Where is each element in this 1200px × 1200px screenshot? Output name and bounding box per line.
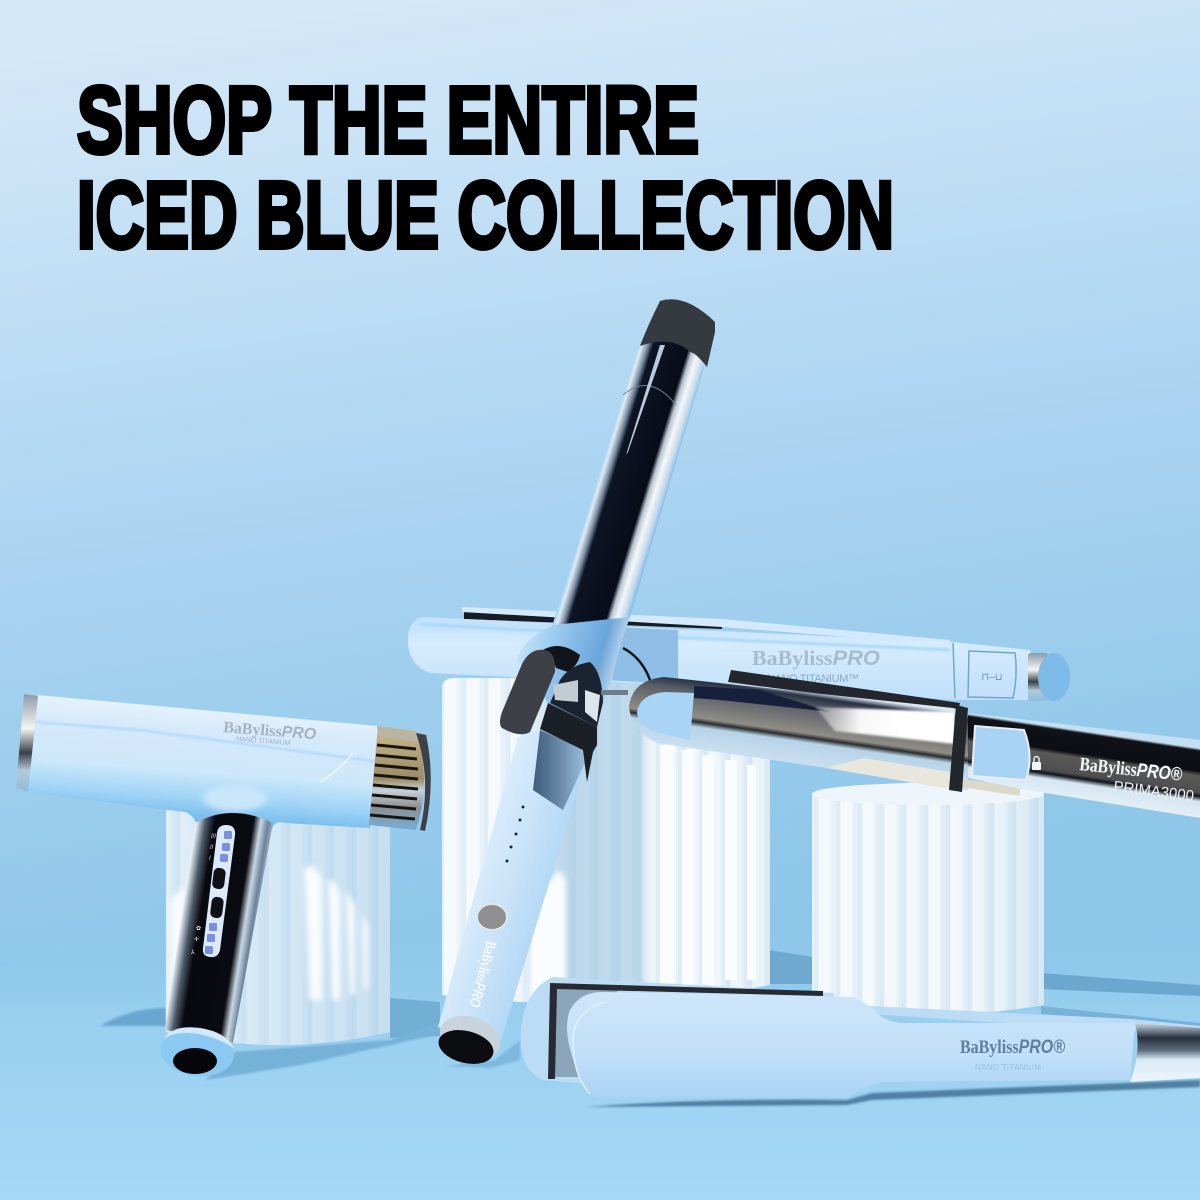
wand logo: BaBylissPRO (465, 939, 500, 1009)
top iron subtitle: NANO TITANIUM™ (767, 673, 859, 685)
dryer neck glow (203, 785, 267, 811)
dryer logo: BaBylissPRO (223, 719, 317, 743)
bottom iron chrome tip (1130, 1023, 1200, 1082)
prima dark top reflection (694, 686, 831, 712)
bottom iron paddle edge light (573, 1002, 606, 1094)
wand clip lever (500, 650, 555, 734)
prima highlight (815, 707, 955, 744)
wand hinge dark (543, 646, 580, 672)
pedestal: right (812, 780, 1044, 1020)
pedestal top (812, 783, 1044, 805)
dryer icons: ✢ (194, 936, 199, 943)
flat iron: chrome Prima 3000 (629, 670, 1200, 818)
prima model name: PRIMA3000 (1113, 778, 1195, 805)
dryer icons: // (210, 845, 214, 851)
prima black band (949, 705, 968, 792)
title line 2: ICED BLUE COLLECTION (77, 162, 894, 268)
top iron shaded section near barrel (604, 627, 678, 684)
prima logo: BaBylissPRO® (1078, 754, 1183, 786)
wand power button (477, 904, 507, 930)
top iron highlight (420, 624, 950, 650)
dryer end cap (157, 1023, 237, 1081)
bottom iron mirror plate (553, 985, 620, 1077)
wand barrel seam (623, 386, 676, 405)
top iron chrome collar (1028, 653, 1048, 701)
pedestal: left (166, 810, 390, 1050)
light stripes on left pedestal (170, 866, 368, 1020)
curling wand (434, 299, 715, 1069)
bottom iron back arm (521, 977, 840, 1085)
prima right section (968, 713, 1200, 818)
dryer barrel (28, 695, 378, 830)
bottom iron logo: BaBylissPRO® (960, 1037, 1065, 1058)
dryer icons: ✿ (196, 925, 201, 932)
flat iron: bottom, wide plate (521, 977, 1200, 1098)
bottom iron subtitle: NANO TITANIUM (975, 1063, 1041, 1072)
prima blue tip cap (637, 692, 694, 740)
dryer buttons (205, 831, 232, 954)
top iron lock icon: ⊓–⊔ (981, 672, 1003, 683)
dryer fan face (416, 733, 431, 831)
wand barrel reflection line (626, 345, 665, 455)
wand indicator dots (506, 806, 524, 862)
wand hinge body (550, 662, 603, 727)
dryer subtitle: NANO TITANIUM (236, 736, 291, 747)
dryer highlight (32, 722, 380, 762)
top iron body (408, 617, 1033, 700)
title (77, 68, 894, 268)
prima upper plate (728, 670, 960, 712)
wand handle shadow (533, 730, 590, 810)
wand connector (601, 690, 628, 695)
dryer chrome handle (165, 813, 273, 1043)
dryer end hole (173, 1048, 217, 1074)
dryer icons: /// (211, 834, 216, 840)
dryer nozzle grille (369, 726, 431, 831)
pedestal: center (442, 676, 770, 1016)
dryer rear cap (16, 694, 38, 792)
wand handle (438, 728, 590, 1050)
title line 1: SHOP THE ENTIRE (77, 68, 699, 174)
wand barrel (553, 332, 704, 660)
dryer icons: ⅄ (190, 949, 195, 956)
top iron hinge panel (953, 643, 1016, 698)
bottom iron plate edge (548, 983, 823, 1079)
wand tip (640, 299, 715, 367)
wand base opening (435, 1025, 497, 1069)
wand clamp collar (517, 617, 630, 727)
top iron logo: BaBylissPRO (752, 646, 880, 670)
prima lock icon (1032, 756, 1041, 770)
top iron end cap (1038, 653, 1070, 701)
wand base chrome (434, 1008, 506, 1068)
flat iron: top, Nano Titanium (408, 607, 1070, 701)
wand hinge glint (585, 690, 600, 722)
dryer icons (190, 834, 216, 956)
top iron cord (623, 648, 650, 680)
wand black band (540, 703, 597, 782)
dryer control panel (203, 825, 235, 957)
top iron upper arm (464, 610, 722, 629)
prima cream reflection (827, 758, 950, 789)
wand hinge chrome (553, 680, 578, 702)
hair dryer (16, 694, 431, 1081)
dryer glint (320, 753, 353, 782)
dryer icons: / (209, 856, 211, 862)
dryer dark toggles (210, 867, 226, 919)
prima blue slider (972, 726, 1030, 780)
prima chrome body (629, 677, 968, 790)
bottom iron front paddle (567, 992, 1135, 1098)
floor shadows (100, 950, 1200, 1107)
